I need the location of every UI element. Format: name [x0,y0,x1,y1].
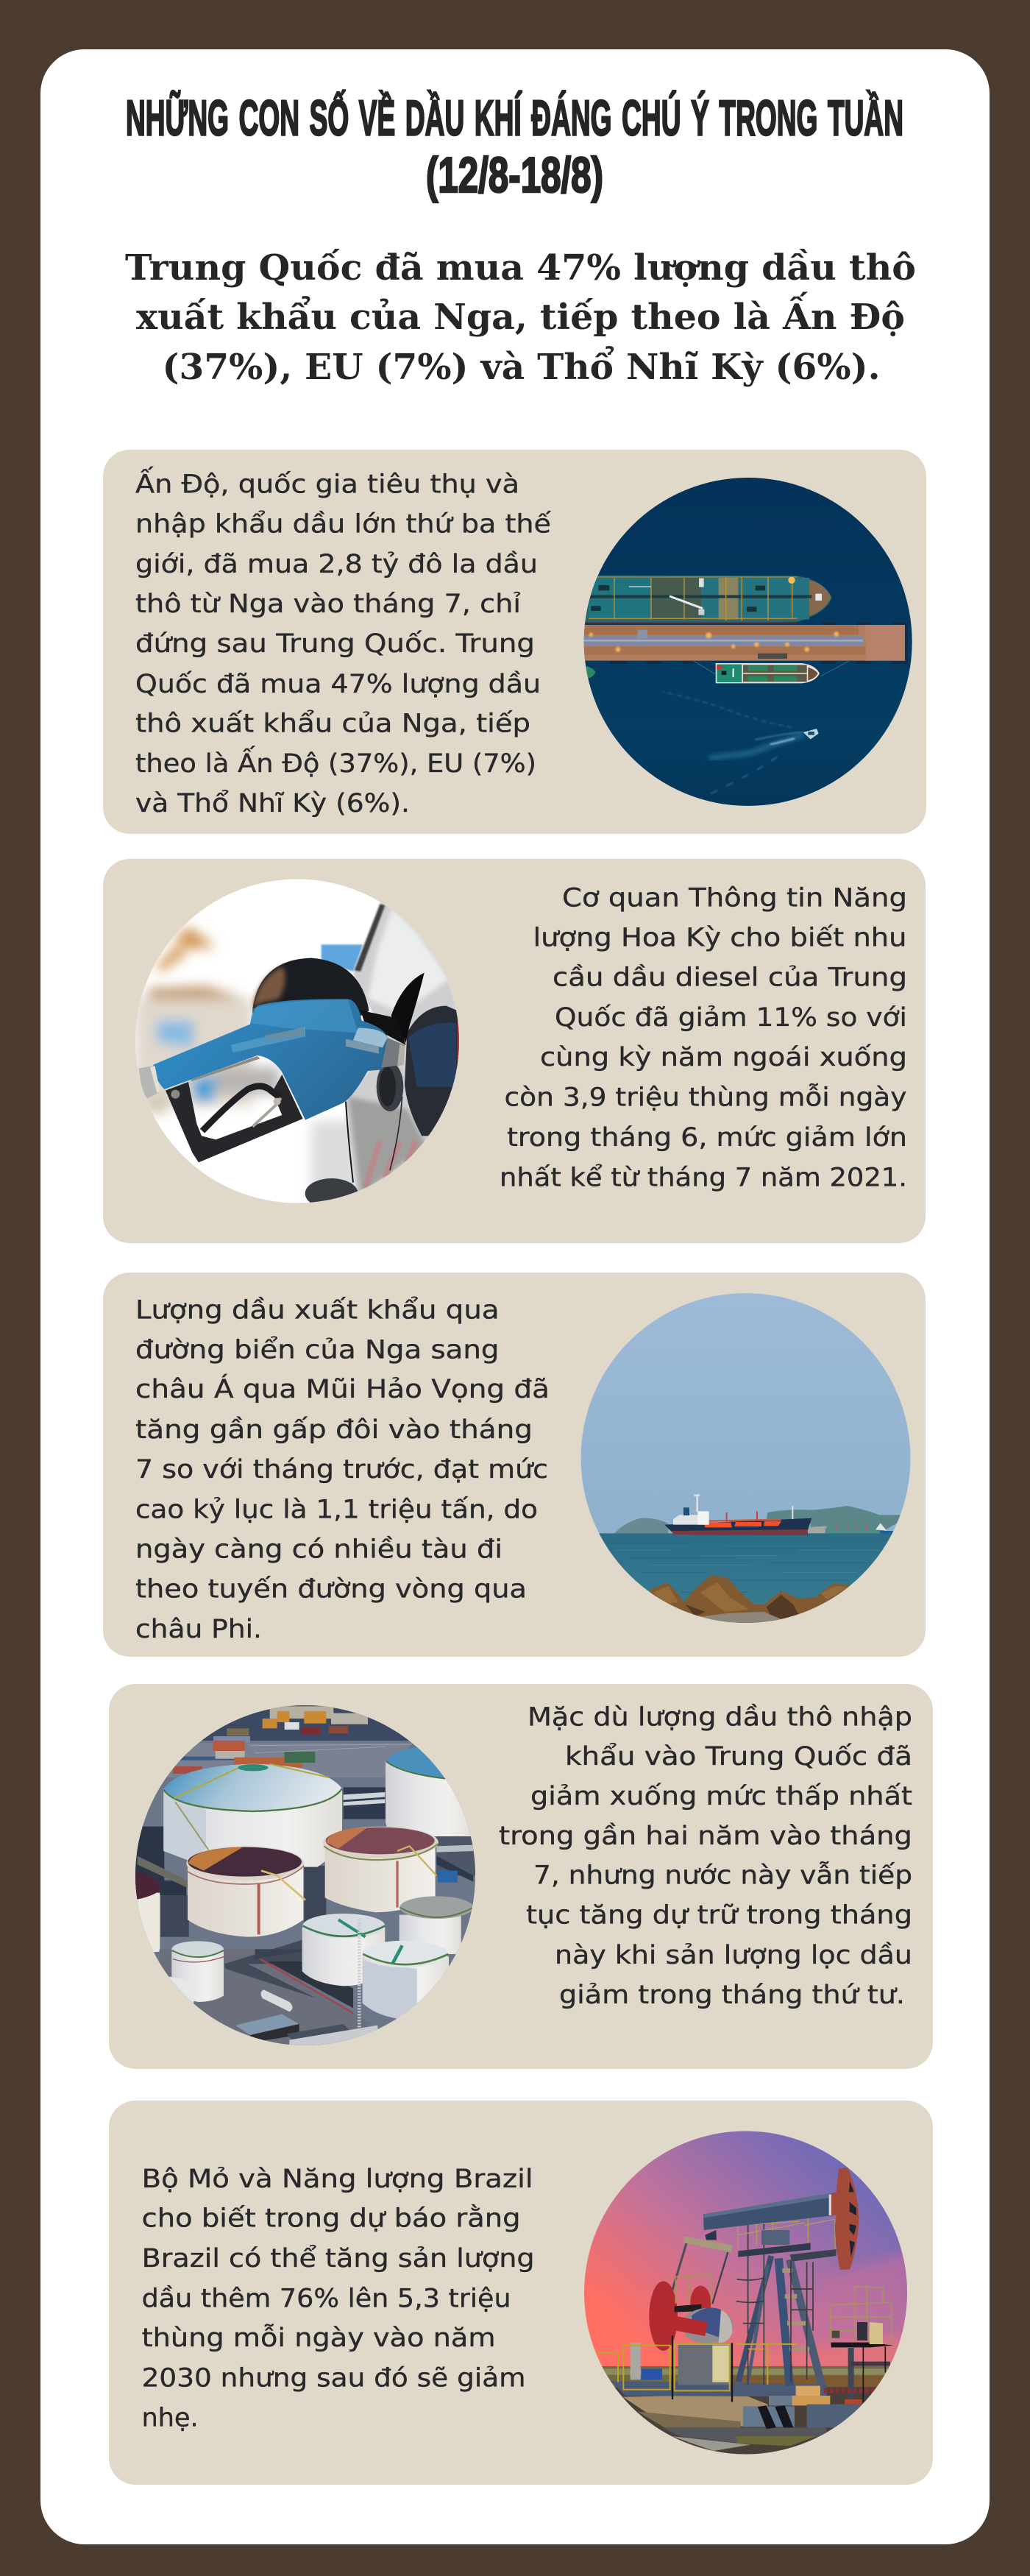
text: EIA diesel demand: trong tháng 6, mức giảm lớn [507,1123,907,1153]
text: Brazil output: nhẹ. [142,2404,199,2433]
tanker hull [581,576,832,623]
yellow fence [596,2344,797,2391]
text: Brazil output: 2030 nhưng sau đó sẽ giảm [142,2363,526,2393]
road [160,1949,370,2050]
horizon field [596,2366,900,2388]
pitman arms [664,2243,686,2316]
open tank left [188,1866,303,1937]
text: India purchases: Ấn Độ, quốc gia tiêu thụ và [135,465,519,499]
photo: oil pumpjack at sunset [581,2127,912,2458]
gearbox [682,2308,734,2343]
text: China stockpile: giảm trong tháng thứ tư. [559,1981,905,2010]
wellhead [842,2348,860,2399]
counterweights [649,2281,678,2351]
text: India purchases: nhập khẩu dầu lớn thứ ba thế [135,509,551,539]
subtitle: (37%), EU (7%) và Thổ Nhĩ Kỳ (6%). [162,345,880,388]
text: China stockpile: khẩu vào Trung Quốc đã [565,1741,912,1772]
tower legs [738,2256,822,2386]
text: seaborne exports: châu Phi. [135,1615,262,1644]
subtitle: Trung Quốc đã mua 47% lượng dầu thô [125,247,916,289]
text: EIA diesel demand: Cơ quan Thông tin Năng [562,883,907,913]
wire and lower cap [346,1102,353,1183]
flap and hose neck [391,973,425,1043]
text: seaborne exports: cao kỷ lục là 1,1 triệu tấn, do [135,1496,538,1525]
panel 4: China stockpile [109,1684,933,2069]
text: seaborne exports: 7 so với tháng trước, đạt mức [135,1455,548,1485]
panel 2: diesel demand [103,859,926,1243]
gearbox base [678,2344,731,2385]
platform [738,2243,811,2257]
right platform [831,2343,893,2347]
text: China stockpile [499,1702,912,2010]
text: EIA diesel demand: cùng kỳ năm ngoái xuống [540,1043,907,1072]
text: seaborne exports: Lượng dầu xuất khẩu qua [135,1295,499,1325]
big dome tank [163,1788,342,1867]
panel 5: Brazil forecast [109,2101,933,2485]
text: Brazil output: thùng mỗi ngày vào năm [142,2323,496,2353]
text: China stockpile: này khi sản lượng lọc dầu [555,1941,912,1970]
walking beam [703,2193,834,2230]
text: India purchases: giới, đã mua 2,8 tỷ đô la dầu [135,550,538,579]
text: India purchases: và Thổ Nhĩ Kỳ (6%). [135,788,410,818]
text: Brazil output [142,2165,535,2433]
text: China stockpile: 7, nhưng nước này vẫn tiếp [533,1861,912,1891]
text: India purchases: Quốc đã mua 47% lượng dầu [135,670,541,699]
text: China stockpile: giảm xuống mức thấp nhất [530,1782,912,1811]
text: EIA diesel demand: Quốc đã giảm 11% so với [555,1003,907,1033]
text: EIA diesel demand: nhất kể từ tháng 7 năm 2021. [500,1162,907,1192]
text: Brazil output: Brazil có thể tăng sản lượng [142,2243,535,2274]
base [769,2396,830,2405]
text: EIA diesel demand: lượng Hoa Kỳ cho biết nhu [533,924,906,953]
speedboat wake [662,692,804,798]
top right tank [386,1761,476,1836]
horsehead [831,2168,859,2270]
text: India purchases: theo là Ấn Độ (37%), EU (7%) [135,745,536,779]
text: China stockpile: Mặc dù lượng dầu thô nhập [528,1702,912,1732]
sea [599,1533,892,1623]
text: China stockpile: tục tăng dự trữ trong tháng [526,1901,912,1931]
text: India purchases: thô xuất khẩu của Nga, tiếp [135,709,530,739]
subtitle: xuất khẩu của Nga, tiếp theo là Ấn Độ [136,291,905,338]
photo: tanker at sea [578,1288,912,1636]
pier [581,625,906,661]
islands [614,1518,668,1533]
panel 3: Cape of Good Hope route [103,1273,926,1657]
text: seaborne exports: theo tuyến đường vòng qua [135,1575,527,1604]
text: EIA diesel demand [500,883,907,1192]
text: seaborne exports: ngày càng có nhiều tàu đi [135,1535,502,1564]
text: seaborne exports: châu Á qua Mũi Hảo Vọng đã [135,1373,550,1404]
bottom buildings [235,2014,299,2035]
text: Brazil output: dầu thêm 76% lên 5,3 triệu [142,2284,511,2313]
ladders and railing [736,2212,813,2385]
text: EIA diesel demand: cầu dầu diesel của Trung [553,963,907,993]
nozzle body [153,999,388,1120]
photo: storage tanks [132,1704,478,2050]
text: Brazil output: cho biết trong dự báo rằng [142,2204,521,2234]
text: seaborne exports [135,1295,550,1644]
rocks [650,1575,850,1623]
photo: fuel nozzle [132,876,464,1209]
ground [615,2387,877,2454]
open tank right [325,1844,436,1912]
small tanks [399,1915,461,1954]
text: seaborne exports: đường biển của Nga sang [135,1335,499,1365]
subtitle [125,247,916,388]
photo: tankers at pier [581,475,916,810]
handle [166,1075,303,1162]
small tanker [716,663,820,683]
text: Brazil output: Bộ Mỏ và Năng lượng Brazil [142,2165,533,2194]
car body [346,903,464,1207]
panel 1: India [103,450,926,834]
edge tank [136,1893,160,1952]
text: EIA diesel demand: còn 3,9 triệu thùng mỗi ngày [505,1082,906,1113]
text: seaborne exports: tăng gần gấp đôi vào tháng [135,1415,533,1445]
gate rail top right [675,2274,892,2346]
lattice and small horizontal tank [358,1919,361,2027]
ship [664,1518,811,1535]
text: India purchases [135,465,551,818]
text: China stockpile: trong gần hai năm vào tháng [499,1822,912,1851]
text: India purchases: đứng sau Trung Quốc. Trung [135,629,535,659]
text: India purchases: thô từ Nga vào tháng 7, chỉ [135,590,521,619]
title [126,90,903,203]
title: (12/8-18/8) [426,147,603,203]
fuel cap [252,958,369,1016]
